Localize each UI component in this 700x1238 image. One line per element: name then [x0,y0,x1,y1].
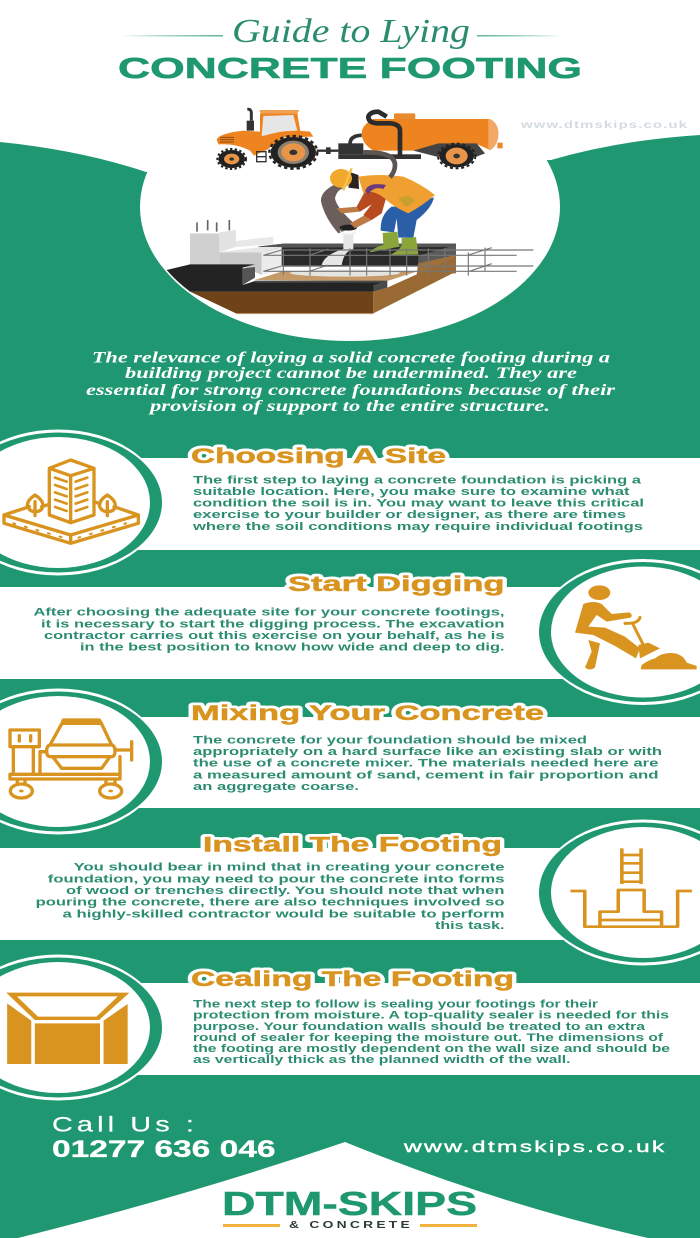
body text: as vertically thick as the planned width of the wall. [193,1054,570,1066]
panel: cealing the footing [0,954,700,1100]
heading: Cealing The Footing [191,967,514,991]
body text: round of sealer for keeping the moisture out. The dimensions of [193,1032,664,1044]
body text: a measured amount of sand, cement in fair proportion and [193,769,658,781]
icon: sealed box footing [6,993,129,1064]
body text: the footing are mostly dependent on the wall size and should be [193,1043,670,1055]
white hero ellipse [140,73,560,341]
heading: Start Digging [288,572,504,596]
body text: of wood or trenches directly. You should note that when [66,885,504,897]
heading [288,572,504,596]
body text: You should bear in mind that in creating your concrete [74,862,504,874]
worker pouring concrete [321,168,435,265]
intro paragraph: essential for strong concrete foundations because of their [86,382,616,399]
body text [193,999,670,1066]
body text: a highly-skilled contractor would be suitable to perform [62,908,504,920]
heading: Mixing Your Concrete [191,701,544,725]
contact: phone [52,1114,276,1163]
body text: foundation, you may need to pour the concrete into forms [48,873,504,885]
rebar cage [263,248,533,276]
tanker trailer [338,112,503,177]
heading: Choosing A Site [191,444,446,468]
body text [193,734,662,793]
heading [191,444,446,468]
heading: Cealing The Footing [191,967,514,991]
panel: install the footing [0,820,700,966]
body text: suitable location. Here, you make sure to examine what [193,486,630,498]
body text: this task. [435,920,504,932]
intro paragraph [86,349,616,415]
icon: building on plot [4,460,138,543]
body text: The next step to follow is sealing your footings for their [193,999,599,1011]
body text [36,862,505,932]
heading [203,833,502,857]
contact: website: www.dtmskips.co.uk [402,1139,666,1156]
body text [191,474,644,533]
foundation illustration [167,220,456,314]
website watermark: www.dtmskips.co.uk [520,119,688,131]
heading: Start Digging [288,572,504,596]
body text [34,607,504,654]
body text: in the best position to know how wide and deep to dig. [80,642,504,654]
body text: condition the soil is in. You may want to leave this critical [193,498,644,510]
logo [222,1185,477,1231]
logo: & CONCRETE [289,1219,413,1231]
icon: footing with ladder [570,848,692,927]
title: Guide to Lying [232,13,470,50]
body text: contractor carries out this exercise on your behalf, as he is [44,630,504,642]
intro paragraph: provision of support to the entire structure. [147,398,550,415]
title [118,13,582,85]
tractor [217,109,338,169]
panel: mixing your concrete [0,688,700,834]
body text: After choosing the adequate site for your concrete footings, [34,607,504,619]
body text: The concrete for your foundation should be mixed [193,734,587,746]
intro paragraph: building project cannot be undermined. They are [125,365,577,382]
white logo triangle [18,1142,648,1238]
heading: Install The Footing [203,833,502,857]
body text: purpose. Your foundation walls should be treated to an extra [193,1021,646,1033]
body text: where the soil conditions may require individual footings [191,521,643,533]
body text: appropriately on a hard surface like an existing slab or with [193,746,662,758]
heading: Mixing Your Concrete [191,701,544,725]
heading: Install The Footing [203,833,502,857]
body text: The first step to laying a concrete foundation is picking a [193,474,643,486]
body text: pouring the concrete, there are also techniques involved so [36,897,505,909]
panel: choosing a site [0,430,700,576]
panel: start digging [0,559,700,705]
intro paragraph: The relevance of laying a solid concrete footing during a [92,349,610,366]
heading [191,967,514,991]
logo: DTM-SKIPS [222,1185,477,1222]
body text: protection from moisture. A top-quality sealer is needed for this [193,1010,669,1022]
icon: worker digging [575,585,697,669]
title: CONCRETE FOOTING [118,53,582,85]
body text: exercise to your builder or designer, as there are times [193,509,626,521]
icon: concrete mixer [10,720,132,798]
contact: phone: Call Us : [52,1114,198,1136]
body text: the use of a concrete mixer. The materials needed here are [193,758,658,770]
body text: it is necessary to start the digging process. The excavation [41,618,504,630]
heading: Choosing A Site [191,444,446,468]
contact: phone: 01277 636 046 [52,1136,276,1163]
body text: an aggregate coarse. [193,781,359,793]
heading [191,701,544,725]
